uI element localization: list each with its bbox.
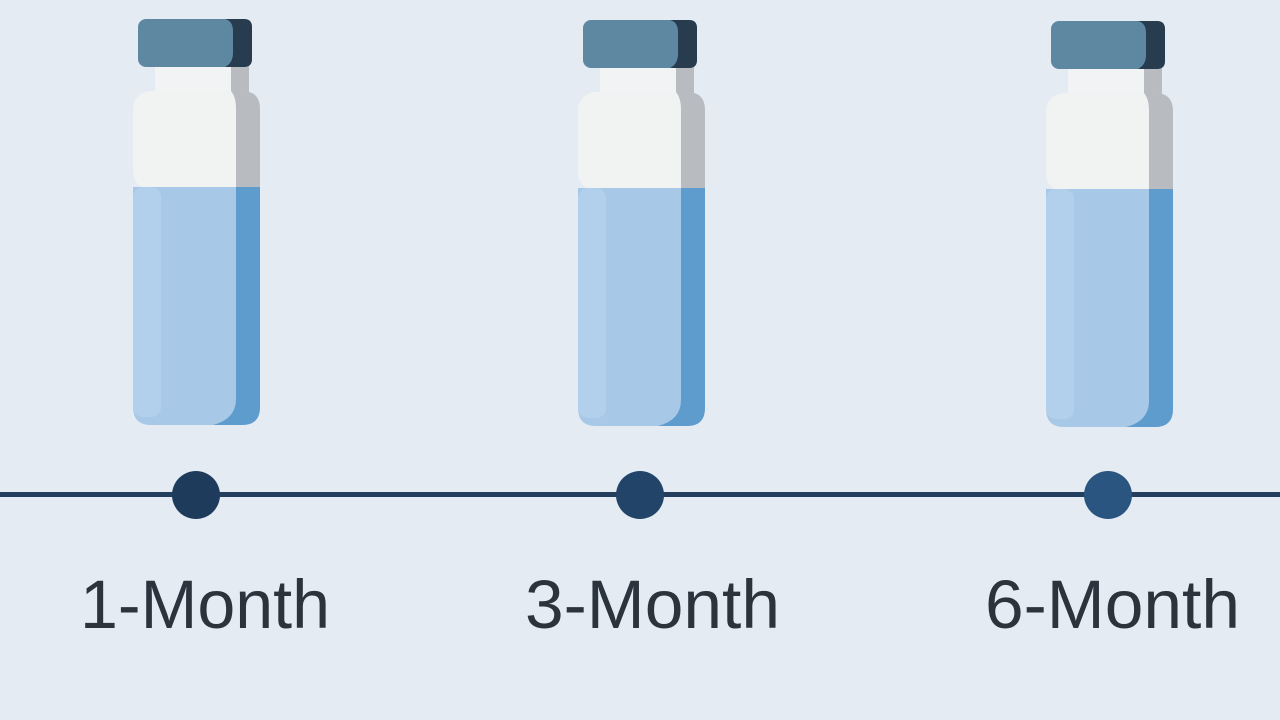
vial: 6-Month — [1046, 21, 1173, 427]
vial: 1-Month — [133, 19, 260, 425]
timeline — [0, 471, 1280, 519]
label: 3-Month: 3-Month — [525, 566, 780, 643]
label: 6-Month: 6-Month — [985, 566, 1240, 643]
marker: 1-Month — [172, 471, 220, 519]
marker: 6-Month — [1084, 471, 1132, 519]
label: 1-Month: 1-Month — [80, 566, 330, 643]
vial: 3-Month — [578, 20, 705, 426]
marker: 3-Month — [616, 471, 664, 519]
